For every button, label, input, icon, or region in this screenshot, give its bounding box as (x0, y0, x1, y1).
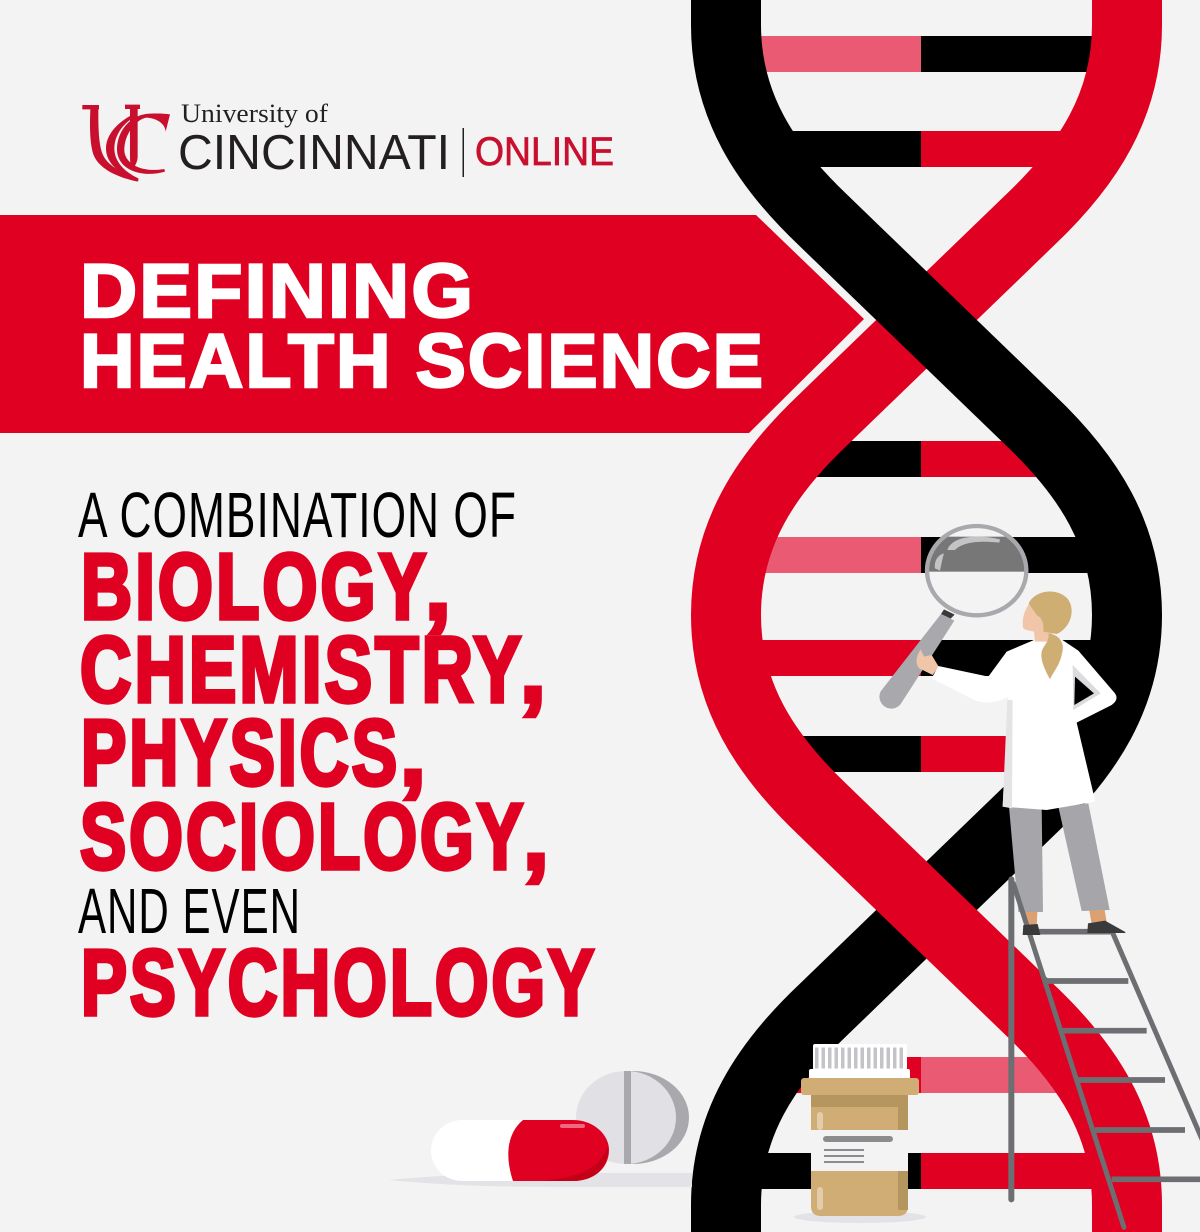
hair (1029, 591, 1072, 634)
ladder right rail (1110, 927, 1200, 1150)
logo text: Online: ONLINE (475, 130, 614, 174)
logo divider (462, 128, 464, 177)
title line 1: DEFINING (80, 249, 475, 334)
bottle body (811, 1095, 908, 1216)
banner shape (0, 215, 864, 433)
red strand, upper half (726, 0, 1127, 615)
Psychology: PSYCHOLOGY (81, 930, 597, 1034)
logo text: University of: University of (181, 99, 328, 128)
trousers (1009, 803, 1110, 912)
red strand, lower half (726, 615, 1127, 1232)
Physics: PHYSICS (81, 700, 400, 804)
and even: AND EVEN (78, 875, 301, 947)
intro line: A COMBINATION OF (78, 479, 517, 551)
ladder (1011, 879, 1200, 1227)
ladder front pole (1002, 879, 1020, 1199)
logo mark: interlocked UC (82, 105, 170, 182)
ladder rungs (1027, 932, 1200, 1179)
lab coat (932, 638, 1117, 810)
hand (917, 649, 939, 675)
medicine bottle (794, 1044, 926, 1223)
Sociology: , (523, 784, 549, 888)
magnifying glass (879, 526, 1030, 709)
pill ground shadow (389, 1173, 692, 1187)
bottle label (811, 1130, 908, 1171)
lens ring (927, 526, 1026, 615)
lens view of dark rung (923, 537, 1030, 572)
coat shadow (1003, 700, 1013, 808)
Biology: BIOLOGY (81, 534, 429, 638)
bottle cap (801, 1044, 919, 1095)
neck and face (1023, 603, 1053, 642)
ladder left rail (1013, 883, 1124, 1227)
title banner arrow (0, 215, 864, 433)
Chemistry: , (520, 618, 546, 722)
logo: University of Cincinnati Online (82, 99, 614, 182)
lens (927, 526, 1026, 615)
round tablet (576, 1071, 689, 1164)
Physics: , (400, 700, 426, 804)
Chemistry: CHEMISTRY (80, 618, 524, 722)
Sociology: SOCIOLOGY (80, 784, 526, 888)
arm gap background (1074, 677, 1094, 705)
handle neck (941, 609, 955, 619)
arm gap (1073, 665, 1101, 710)
lens highlights (935, 537, 1000, 571)
capsule (431, 1120, 609, 1181)
title line 2: HEALTH SCIENCE (80, 319, 765, 404)
logo text: Cincinnati: CINCINNATI (178, 126, 450, 180)
ankles (1023, 910, 1107, 926)
Biology: , (425, 534, 451, 638)
handle (879, 614, 954, 709)
bottle shadow (794, 1211, 926, 1223)
pills (389, 1071, 692, 1187)
disciplines text block (78, 479, 597, 1034)
base pair rungs (740, 36, 1111, 1189)
scientist shoes (1023, 921, 1125, 935)
DNA double helix (726, 0, 1127, 1232)
black strand (726, 0, 1127, 1232)
scientist (917, 591, 1117, 926)
ponytail (1041, 633, 1063, 679)
